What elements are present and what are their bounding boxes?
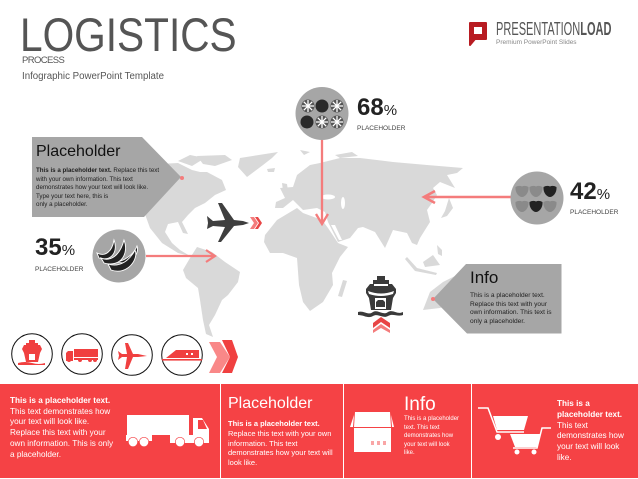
callout marker: australia — [431, 297, 435, 301]
panel 2 heading: Placeholder — [228, 395, 312, 412]
panel 4 text: placeholder text. — [557, 410, 622, 419]
panel 3 text: text. This text — [404, 424, 440, 430]
callout: info — [434, 264, 562, 334]
callout text: Replace this text with your — [470, 301, 547, 308]
world map — [138, 150, 463, 337]
panel 2 text: Replace this text with your own — [228, 429, 331, 438]
stat: 68 percent: 68% — [357, 94, 397, 121]
panel 1 text: own information. This is only — [10, 439, 113, 448]
red panel 4 — [472, 384, 638, 478]
label: 68 percent: PLACEHOLDER — [357, 125, 405, 132]
circle: 35 percent — [92, 230, 146, 282]
icon: carts — [478, 407, 551, 454]
red panel 3 — [344, 384, 471, 478]
panel 2 text: demonstrates how your text will — [228, 448, 333, 457]
panel 1 text: your text will look like. — [10, 417, 89, 426]
panel 4 text — [557, 399, 624, 462]
logo mark — [469, 22, 487, 46]
callout text: This is a placeholder text. Replace this text — [36, 167, 159, 174]
title: LOGISTICS — [20, 8, 236, 62]
panel 1 text: Replace this text with your — [10, 428, 106, 437]
transport icons row — [12, 334, 202, 375]
callout text — [36, 167, 160, 208]
arrow: left — [424, 191, 511, 203]
panel 4 text: This is a — [557, 399, 590, 408]
callout text: own information. This text is — [470, 309, 552, 316]
panel 1 text: a placeholder. — [10, 450, 61, 459]
label: 35 percent: PLACEHOLDER — [35, 266, 83, 273]
map seas — [321, 194, 345, 240]
panel 3 text — [404, 416, 459, 456]
red panel 1 — [0, 384, 220, 478]
icon: red chevrons up — [373, 317, 390, 333]
panel 1 text: This text demonstrates how — [10, 407, 110, 416]
icon: ship — [18, 340, 45, 365]
panel 4 text: demonstrates how — [557, 431, 624, 440]
panel 3 text: This is a placeholder — [404, 416, 459, 422]
panel 1 text: This is a placeholder text. — [10, 396, 110, 405]
callout text: only a placeholder. — [470, 318, 525, 325]
panel 4 text: This text — [557, 421, 588, 430]
stat: 42 percent: 42% — [570, 178, 610, 205]
callout heading: Placeholder — [36, 143, 120, 160]
icon: plane small — [118, 343, 147, 369]
red panel 2 — [221, 384, 343, 478]
callout text: Type your text here, this is — [36, 192, 108, 200]
icon: airplane — [207, 203, 249, 242]
panel 4 text: your text will look — [557, 442, 619, 451]
logo — [469, 19, 611, 46]
callout marker — [180, 176, 184, 180]
arrow: right — [146, 250, 215, 262]
callout text: This is a placeholder text. — [470, 292, 545, 299]
circle: 42 percent — [510, 172, 564, 224]
panel 2 text: look like. — [228, 458, 257, 467]
callout text — [470, 292, 552, 325]
icon: ferry — [358, 276, 403, 317]
logo text: PRESENTATIONLOAD — [496, 19, 611, 39]
logo tagline: Premium PowerPoint Slides — [496, 39, 577, 46]
panel 2 text — [228, 419, 333, 467]
icon: train — [162, 350, 202, 361]
icon: box — [350, 412, 394, 452]
panel 2 text: information. This text — [228, 439, 297, 448]
callout text: with your own information. This text — [36, 176, 133, 182]
panel 3 text: like. — [404, 450, 415, 456]
panel 2 text: This is a placeholder text. — [228, 419, 320, 428]
callout text: demonstrates how your text will look like. — [36, 184, 148, 191]
callout text: only a placeholder. — [36, 201, 88, 208]
circle: 68 percent — [296, 87, 348, 140]
icon: red chevrons right — [250, 217, 262, 229]
callout heading: Info — [470, 268, 498, 287]
subtitle: template: Infographic PowerPoint Template — [22, 71, 164, 82]
panel 4 text: like. — [557, 453, 572, 462]
subtitle: process: PROCESS — [22, 55, 64, 66]
icon: large chevrons — [209, 340, 238, 373]
panel 1 text — [10, 396, 114, 459]
panel 3 text: your text will look — [404, 442, 450, 448]
callout: placeholder — [32, 137, 180, 217]
icon: truck — [66, 349, 98, 362]
arrow: down — [316, 139, 328, 224]
panel 3 heading: Info — [404, 394, 436, 415]
stat: 35 percent: 35% — [35, 234, 75, 261]
panel 3 text: demonstrates how — [404, 433, 453, 439]
icon: truck white — [126, 415, 209, 447]
label: 42 percent: PLACEHOLDER — [570, 209, 618, 216]
